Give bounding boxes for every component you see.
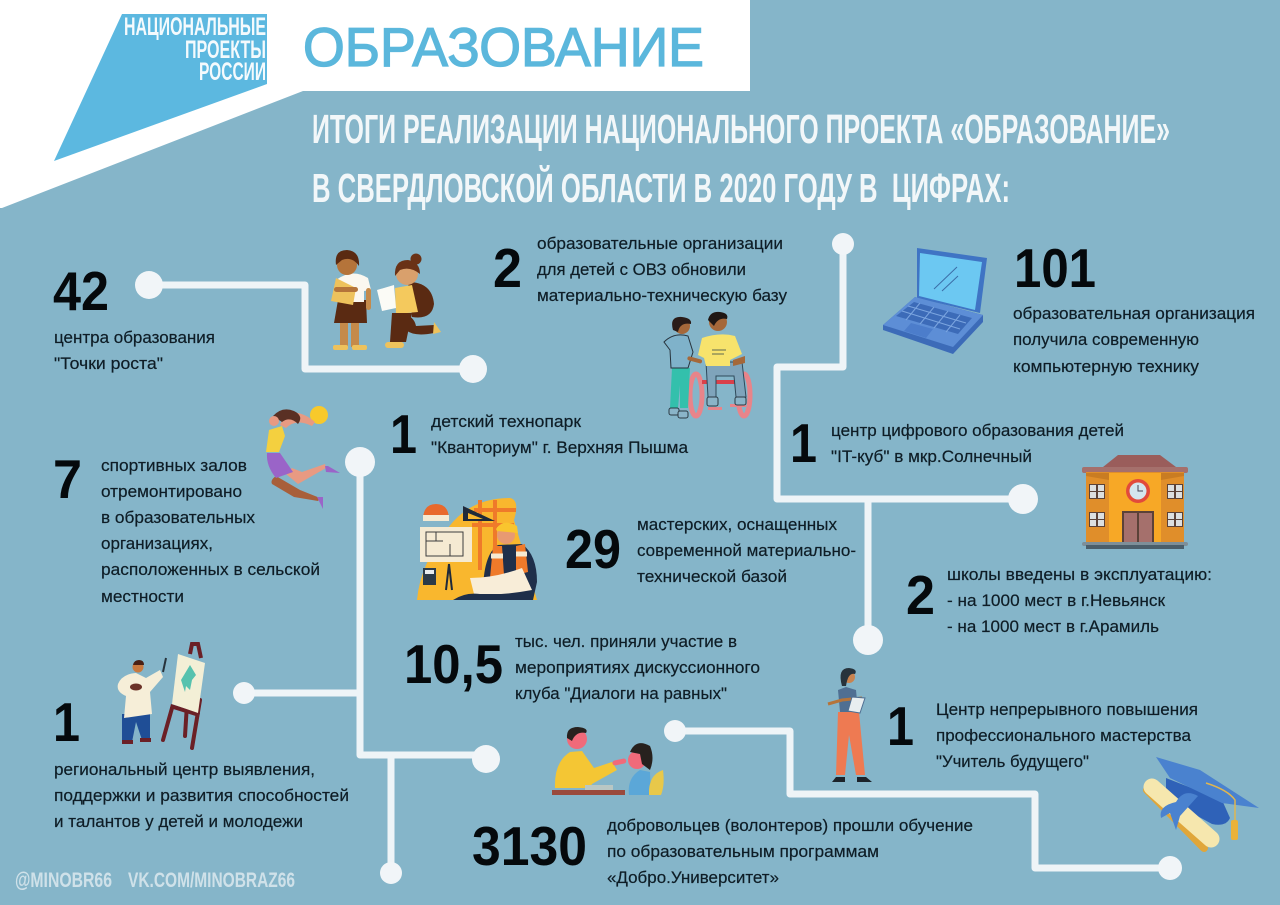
stat: 29 workshops: технической базой	[637, 567, 787, 586]
title	[312, 106, 1170, 211]
stat: 7 sports halls: в образовательных	[101, 508, 256, 527]
icon: construction worker with plans	[417, 498, 537, 600]
icon: person and wheelchair user	[664, 312, 750, 418]
heading: education: ОБРАЗОВАНИЕ	[303, 16, 704, 78]
header white banner	[0, 0, 750, 208]
icon: teacher with tablet	[828, 668, 872, 782]
logo: national projects	[54, 13, 267, 161]
stat: 1 technopark: детский технопарк	[431, 412, 582, 431]
stat: 7 sports halls: расположенных в сельской	[101, 560, 320, 579]
stat: 3130 volunteers: добровольцев (волонтеров) прошли обучение	[607, 816, 973, 835]
connector: top right	[777, 233, 1038, 655]
stat: 29 workshops: 29	[565, 518, 621, 580]
stat: 7 sports halls	[53, 448, 320, 606]
stat: 101 organisations	[1013, 237, 1255, 376]
stat: 1 regional centre: поддержки и развития способностей	[54, 786, 349, 805]
icon: tutor and student	[552, 727, 664, 795]
icon: graduation cap and diploma	[1147, 757, 1259, 848]
stat: 7 sports halls: спортивных залов	[101, 456, 247, 475]
stat: 2 schools: 2	[906, 564, 935, 626]
stat: 1 IT cube: 1	[790, 412, 817, 474]
stat: 10,5 thousand: клуба "Диалоги на равных"	[515, 684, 727, 703]
stat: 42 growth centres: "Точки роста"	[54, 354, 163, 373]
icon: painter at easel	[118, 644, 205, 748]
stat: 101 organisations: получила современную	[1013, 330, 1199, 349]
stat: 101 organisations: компьютерную технику	[1013, 357, 1200, 376]
footer social handles	[15, 869, 295, 892]
stat: 3130 volunteers: «Добро.Университет»	[607, 868, 779, 887]
stat: 1 IT cube: центр цифрового образования детей	[831, 421, 1124, 440]
icon: laptop	[883, 248, 987, 354]
connector: top left	[135, 271, 487, 383]
stat: 1 teacher of the future	[887, 695, 1198, 771]
stat: 1 regional centre: региональный центр выявления,	[54, 760, 315, 779]
logo: national projects: НАЦИОНАЛЬНЫЕ	[124, 13, 266, 41]
footer social handles: VK.COM/MINOBRAZ66	[128, 869, 295, 892]
stat: 1 teacher of the future: "Учитель будущего"	[936, 752, 1089, 771]
stat: 7 sports halls: организациях,	[101, 534, 213, 553]
footer social handles: @MINOBR66	[15, 869, 112, 892]
stat: 42 growth centres: центра образования	[54, 328, 215, 347]
stat: 3130 volunteers	[472, 815, 973, 887]
stat: 10,5 thousand	[404, 632, 760, 703]
stat: 42 growth centres	[53, 260, 215, 373]
stat: 1 teacher of the future: 1	[887, 695, 914, 757]
stat: 1 teacher of the future: профессионального мастерства	[936, 726, 1192, 745]
icon: schoolchildren	[331, 250, 441, 350]
stat: 2 schools: - на 1000 мест в г.Невьянск	[947, 591, 1166, 610]
stat: 2 organisations: 2	[493, 237, 522, 299]
stat: 3130 volunteers: 3130	[472, 815, 587, 877]
icon: volleyball player	[266, 406, 340, 509]
stat: 1 teacher of the future: Центр непрерывного повышения	[936, 700, 1198, 719]
connector: centre left	[233, 447, 500, 884]
stat: 1 IT cube	[790, 412, 1124, 474]
stat: 2 schools	[906, 564, 1212, 636]
stat: 7 sports halls: отремонтировано	[101, 482, 242, 501]
stat: 1 IT cube: "IT-куб" в мкр.Солнечный	[831, 447, 1032, 466]
stat: 101 organisations: 101	[1014, 237, 1096, 299]
logo: national projects: ПРОЕКТЫ	[185, 36, 266, 64]
stat: 2 schools: школы введены в эксплуатацию:	[947, 565, 1212, 584]
logo: national projects: РОССИИ	[199, 58, 266, 86]
stat: 2 organisations: материально-техническую базу	[537, 286, 787, 305]
stat: 29 workshops: мастерских, оснащенных	[637, 515, 837, 534]
stat: 3130 volunteers: по образовательным программам	[607, 842, 879, 861]
stat: 2 organisations: для детей с ОВЗ обновили	[537, 260, 746, 279]
stat: 1 regional centre: 1	[53, 691, 80, 753]
stat: 29 workshops	[565, 515, 856, 586]
stat: 10,5 thousand: тыс. чел. приняли участие в	[515, 632, 737, 651]
stat: 2 schools: - на 1000 мест в г.Арамиль	[947, 617, 1159, 636]
connector: bottom right	[664, 720, 1182, 880]
stat: 1 regional centre: и талантов у детей и молодежи	[54, 812, 303, 831]
stat: 1 technopark	[390, 403, 689, 465]
stat: 29 workshops: современной материально-	[637, 541, 856, 560]
stat: 10,5 thousand: мероприятиях дискуссионного	[515, 658, 760, 677]
stat: 101 organisations: образовательная организация	[1013, 304, 1255, 323]
stat: 7 sports halls: 7	[53, 448, 82, 510]
stat: 2 organisations: образовательные организации	[537, 234, 783, 253]
stat: 1 technopark: "Кванториум" г. Верхняя Пышма	[431, 438, 689, 457]
stat: 42 growth centres: 42	[53, 260, 109, 322]
stat: 10,5 thousand: 10,5	[404, 633, 503, 695]
icon: school building	[1082, 455, 1188, 549]
stat: 7 sports halls: местности	[101, 587, 184, 606]
stat: 1 technopark: 1	[390, 403, 417, 465]
stat: 1 regional centre	[53, 691, 349, 831]
stat: 2 organisations	[493, 234, 787, 305]
